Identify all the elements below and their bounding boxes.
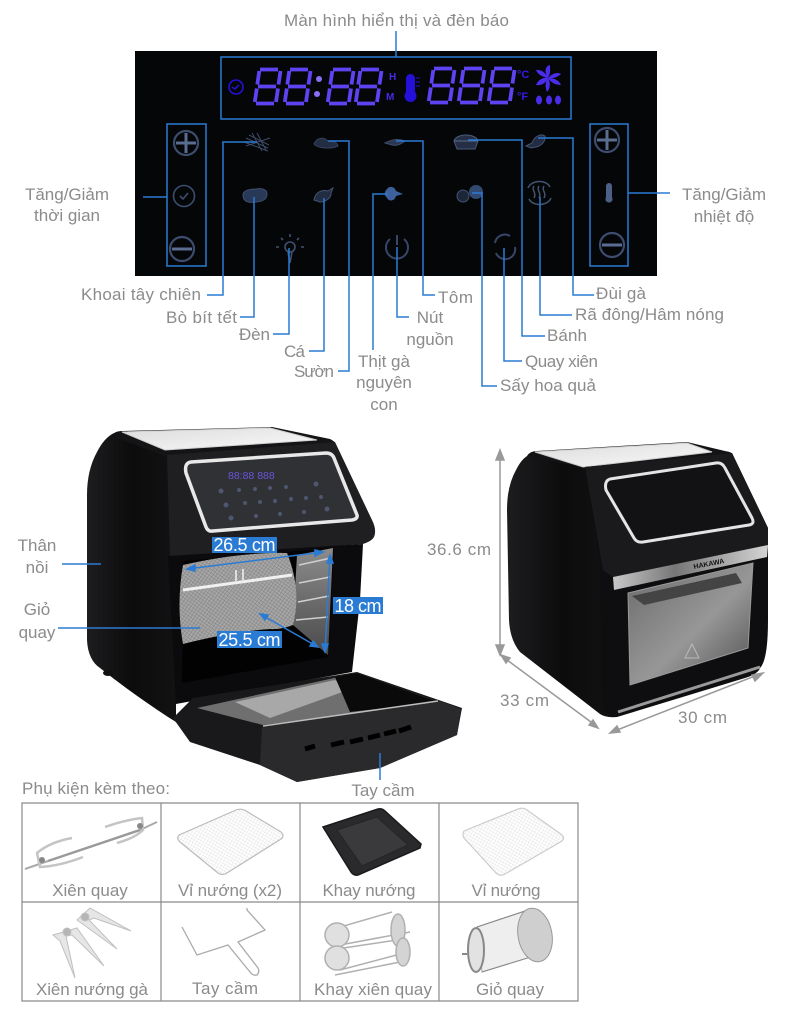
heading: display label: Màn hình hiển thị và đèn báo	[284, 11, 509, 30]
label: handle: Tay cầm	[351, 781, 415, 800]
icon: rotate	[495, 235, 515, 259]
label: whole chicken: con	[370, 395, 398, 414]
warning triangle	[685, 644, 699, 658]
label: baking tray: Khay nướng	[322, 881, 416, 900]
front	[585, 453, 768, 717]
body side	[507, 455, 617, 717]
label: time adjust: thời gian	[34, 206, 100, 225]
mini display: 88:88 888	[228, 470, 275, 482]
item: wire rack x2	[178, 809, 283, 874]
label: body: Thân	[18, 536, 56, 555]
callout: display frame and leader	[221, 31, 571, 119]
label: ribs: Sườn	[294, 362, 334, 381]
product: open air fryer	[87, 427, 462, 782]
top	[527, 442, 732, 468]
label: rotisserie skewer: Xiên quay	[52, 881, 128, 900]
label: drum basket: Giỏ quay	[476, 980, 544, 999]
label: fish: Cá	[284, 342, 306, 361]
leader: basket	[58, 627, 200, 629]
label: height: 36.6 cm	[427, 540, 491, 559]
item: rotisserie skewer	[25, 818, 157, 869]
cavity	[182, 548, 334, 683]
hood	[167, 442, 375, 558]
hood	[585, 453, 768, 577]
callout: time control frame	[143, 124, 206, 266]
door	[173, 672, 462, 782]
label: shrimp: Tôm	[438, 288, 473, 307]
rotisserie rod	[183, 575, 292, 590]
label: time adjust: Tăng/Giảm	[25, 185, 109, 204]
icon: pie	[454, 135, 478, 149]
icon: timer	[174, 186, 194, 206]
rack wall	[293, 548, 333, 655]
label: wire rack: Vỉ nướng	[472, 881, 540, 900]
arrows: dimensions	[496, 450, 763, 733]
badge: 25.5 cm: 25.5 cm	[218, 630, 280, 650]
label: power: Nút	[417, 308, 443, 327]
icon: power	[386, 235, 408, 258]
display: clock digits: H	[389, 72, 396, 83]
front frame	[168, 544, 363, 704]
label: body: nồi	[26, 558, 48, 577]
heading: accessories: Phụ kiện kèm theo:	[22, 779, 170, 798]
item: wire rack	[463, 808, 564, 875]
label: whole chicken: nguyên	[356, 373, 412, 392]
icon: fish	[314, 188, 333, 202]
icon: minus left	[170, 237, 194, 261]
glass door	[628, 563, 753, 685]
label: basket: Giỏ	[24, 600, 50, 619]
window	[606, 463, 753, 542]
table: accessories	[22, 803, 578, 1001]
item: rack handle	[182, 908, 265, 975]
icon: light	[276, 234, 304, 263]
door vents	[305, 727, 411, 749]
label: fries: Khoai tây chiên	[81, 285, 201, 304]
product: closed air fryer	[507, 442, 768, 717]
basket	[180, 553, 296, 644]
label: steak: Bò bít tết	[166, 308, 237, 327]
brand: HAKAWA	[693, 558, 725, 571]
display: clock digits: M	[386, 92, 394, 103]
icon: minus right	[600, 233, 624, 257]
icon: shrimp	[385, 140, 405, 145]
label: whole chicken: Thịt gà	[358, 352, 411, 371]
label: rotisserie: Quay xiên	[525, 352, 598, 371]
icon: chicken	[385, 187, 403, 200]
label: light: Đèn	[239, 325, 270, 344]
callout: temperature control frame	[590, 124, 670, 266]
label: rack handle: Tay cầm	[192, 979, 258, 998]
label: power	[406, 308, 454, 349]
leader: handle	[379, 753, 381, 780]
label: drumstick: Đùi gà	[596, 284, 647, 303]
display: clock digits	[255, 70, 396, 104]
icon: fruit	[457, 185, 483, 202]
label: depth: 33 cm	[500, 691, 549, 710]
icon: display clock	[229, 80, 243, 94]
mini buttons	[218, 482, 330, 520]
leader lines: buttons	[207, 138, 594, 386]
icon: display thermometer	[404, 74, 420, 102]
label: temperature adjust: Tăng/Giảm	[682, 185, 766, 204]
display: temperature digits	[429, 68, 529, 103]
item: baking tray	[323, 809, 421, 875]
icon: fan	[536, 65, 561, 104]
callout: dimension arrows	[187, 550, 333, 652]
lid	[112, 427, 335, 457]
display: temperature digits: °C	[517, 69, 529, 81]
icon: thaw	[528, 181, 551, 205]
body side	[87, 433, 176, 722]
label: temperature adjust: nhiệt độ	[694, 207, 754, 226]
badge: 18 cm: 18 cm	[334, 596, 382, 616]
label: whole chicken	[356, 352, 412, 414]
silver strip	[613, 545, 768, 590]
label: wire rack x2: Vỉ nướng (x2)	[178, 881, 282, 900]
icon: plus right	[595, 128, 619, 152]
label: thaw: Rã đông/Hâm nóng	[575, 305, 724, 324]
icon: thermometer	[605, 183, 613, 203]
label: power: nguồn	[406, 330, 454, 349]
door apron	[260, 701, 461, 782]
foot	[103, 670, 113, 676]
label: body	[18, 536, 56, 577]
icon: ribs	[314, 138, 338, 148]
door glass	[197, 673, 438, 725]
icon: drumstick	[526, 135, 545, 148]
label: cake: Bánh	[547, 326, 587, 345]
icon: steak	[243, 189, 267, 202]
badge: 26.5 cm: 26.5 cm	[214, 535, 276, 555]
panel: control panel	[135, 51, 657, 276]
leader: body	[62, 563, 101, 565]
label: width: 30 cm	[678, 708, 727, 727]
label: dried fruit: Sấy hoa quả	[500, 376, 597, 395]
item: drum basket	[462, 905, 556, 972]
item: chicken fork	[53, 908, 131, 978]
label: rotisserie cage: Khay xiên quay	[314, 980, 432, 999]
label: basket	[19, 600, 56, 642]
bottom strip	[618, 667, 760, 712]
display: temperature digits: °F	[517, 91, 528, 103]
label: chicken fork: Xiên nướng gà	[36, 980, 149, 999]
hood window	[186, 453, 357, 531]
icon: fries	[244, 133, 270, 151]
item: rotisserie cage	[325, 912, 410, 975]
label: temperature adjust	[682, 185, 766, 226]
icon: plus left	[174, 131, 198, 155]
label: basket: quay	[19, 623, 56, 642]
label: time adjust	[25, 185, 109, 225]
